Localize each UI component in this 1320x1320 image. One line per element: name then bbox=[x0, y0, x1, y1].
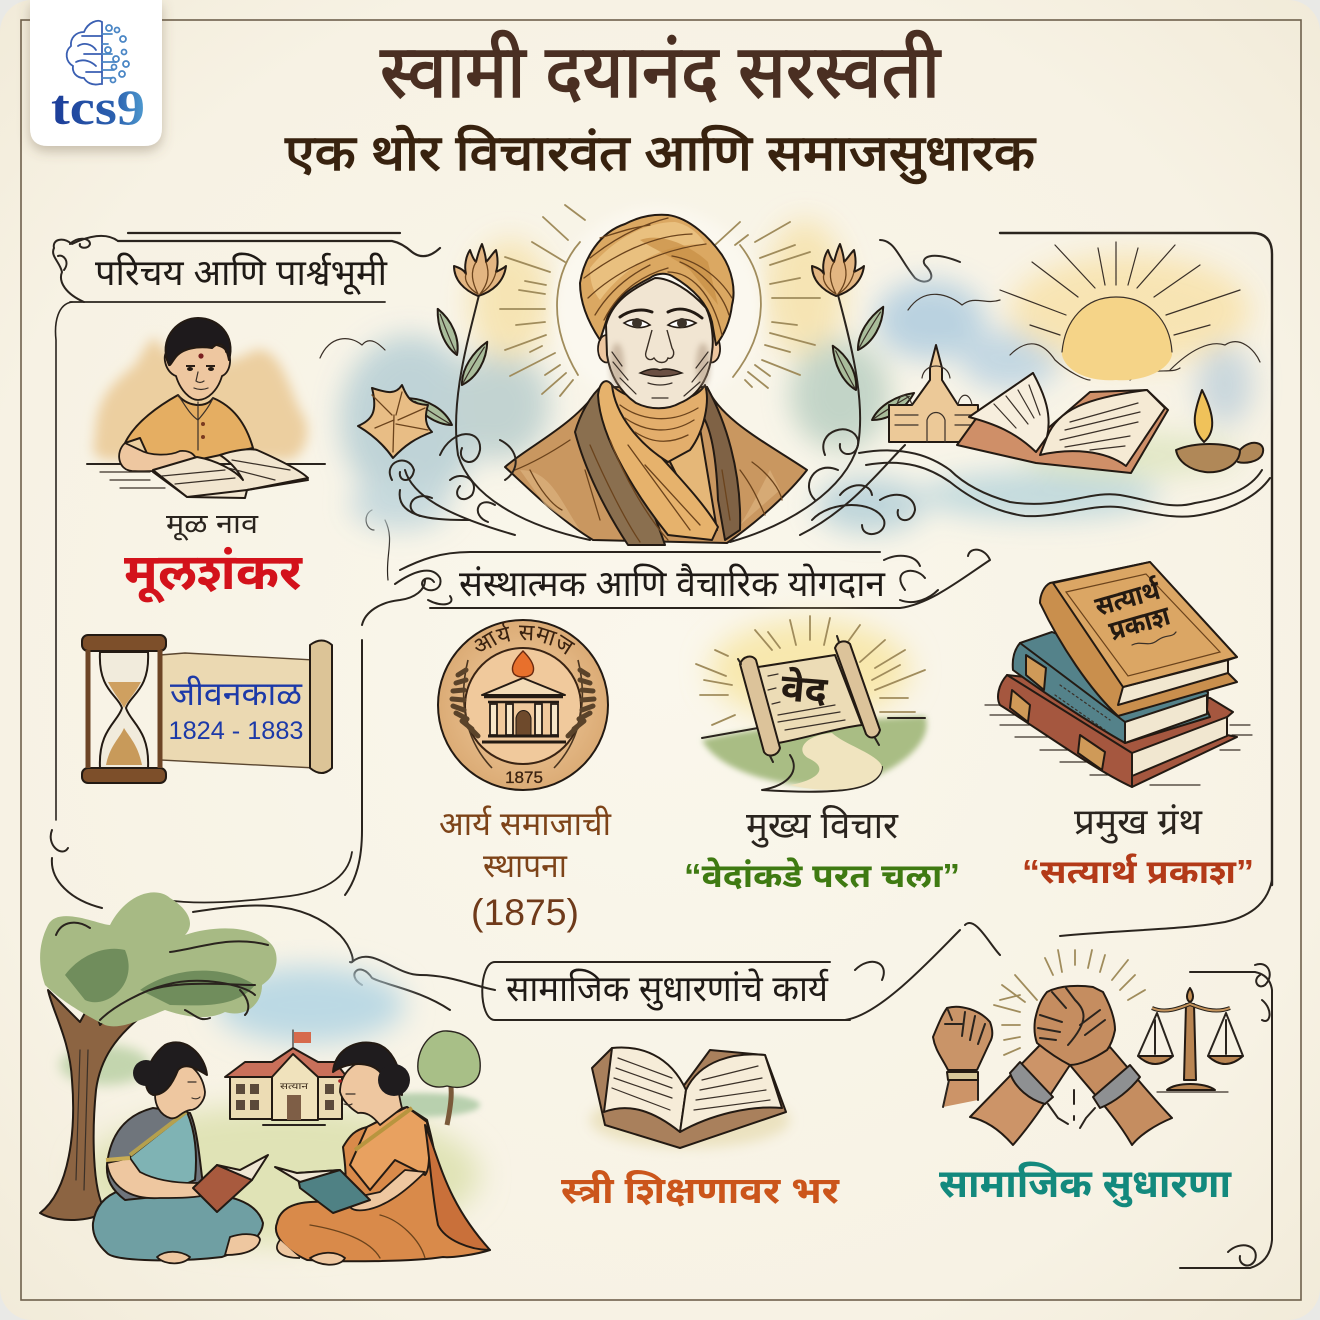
icon: open book bbox=[590, 1047, 790, 1148]
fold lines bbox=[515, 405, 782, 542]
arm bbox=[107, 1158, 213, 1198]
highlight: name: मूलशंकर bbox=[124, 544, 303, 604]
icon: left vine with lotus bbox=[358, 244, 590, 540]
head bbox=[165, 343, 230, 400]
halo arcs bbox=[557, 242, 761, 377]
robe wash highlight bbox=[520, 470, 780, 530]
icon: veda scroll bbox=[696, 616, 927, 792]
subtitle: एक थोर विचारवंत आणि समाजसुधारक bbox=[285, 125, 1037, 184]
icon: book stack: सत्यार्थ bbox=[1091, 574, 1164, 622]
portrait scene bbox=[320, 205, 1270, 545]
logo wordmark: tcs9 bbox=[51, 79, 145, 135]
ears bbox=[598, 335, 720, 362]
halo bbox=[554, 207, 762, 407]
kurta chest bbox=[668, 428, 717, 530]
cloud outlines bbox=[320, 294, 1260, 380]
icon: scroll bbox=[160, 653, 315, 768]
label: establishment: स्थापना bbox=[483, 847, 568, 884]
saree body bbox=[276, 1107, 490, 1261]
icon: right vine with lotus bbox=[730, 244, 917, 542]
icon: seal: 1875 bbox=[505, 768, 543, 787]
icon: turban bbox=[580, 215, 734, 345]
icon: seal bbox=[437, 619, 609, 791]
right forearm bbox=[1070, 1047, 1172, 1145]
heading: introduction: परिचय आणि पार्श्वभूमी bbox=[95, 252, 388, 295]
icon: school: सत्यान bbox=[280, 1081, 309, 1091]
icon: open book bbox=[957, 373, 1168, 473]
torso bbox=[107, 1108, 204, 1200]
icon: book stack bbox=[985, 562, 1252, 787]
blue book bbox=[1013, 632, 1210, 743]
robe bbox=[505, 387, 807, 543]
orange book pages and cover bbox=[1040, 562, 1237, 716]
value: years: 1824 - 1883 bbox=[168, 717, 304, 745]
dark scarf left bbox=[575, 385, 665, 545]
red book bbox=[998, 675, 1237, 787]
label: lifespan: जीवनकाळ bbox=[170, 675, 303, 712]
panel: women's education bbox=[561, 1047, 840, 1211]
icon: temple bbox=[889, 345, 978, 442]
watercolour wash behind portrait bbox=[340, 220, 1253, 533]
panel: childhood bbox=[87, 318, 325, 604]
icon: hourglass bbox=[82, 635, 166, 783]
icon: broken chains and hands bbox=[933, 950, 1172, 1145]
icon: seal: आर्य समाज bbox=[474, 620, 576, 655]
label: founding: आर्य समाजाची bbox=[439, 805, 612, 842]
flower bbox=[358, 385, 432, 458]
label: original name: मूळ नाव bbox=[166, 509, 259, 541]
icon: oil lamp bbox=[1176, 390, 1263, 472]
book bbox=[193, 1165, 252, 1212]
label: main book: प्रमुख ग्रंथ bbox=[1074, 801, 1203, 844]
panel: main book bbox=[985, 562, 1254, 890]
shadow lines bbox=[985, 705, 1252, 785]
icon: veda scroll: वेद bbox=[779, 665, 830, 713]
dark scarf right bbox=[695, 387, 740, 540]
icon: sun bbox=[1000, 242, 1240, 380]
quote: book title: “सत्यार्थ प्रकाश” bbox=[1022, 853, 1254, 890]
label: women's education: स्त्री शिक्षणावर भर bbox=[561, 1170, 840, 1211]
turban folds bbox=[584, 218, 732, 335]
panel: lifespan bbox=[82, 635, 332, 783]
logo card bbox=[30, 0, 162, 146]
icon: scales of justice bbox=[1138, 988, 1243, 1092]
neck wrap bbox=[612, 385, 707, 462]
panel: main thought bbox=[684, 616, 960, 894]
watercolour sky and ground bbox=[60, 967, 480, 1245]
icon: brain circuit bbox=[67, 21, 129, 85]
clasped hands bbox=[1034, 986, 1115, 1065]
light scarf bbox=[598, 381, 718, 540]
icon: boy reading bbox=[87, 318, 325, 498]
book bbox=[153, 449, 308, 498]
shirt bbox=[125, 395, 253, 460]
icon: small tree bbox=[418, 1031, 480, 1125]
arm bbox=[119, 443, 197, 471]
illustration: women reading bbox=[40, 892, 490, 1265]
legs bbox=[93, 1186, 263, 1260]
panel: arya samaj seal bbox=[437, 619, 612, 933]
section frames and flourishes bbox=[51, 233, 1272, 1268]
icon: tree bbox=[40, 892, 277, 1220]
value: year: (1875) bbox=[471, 892, 579, 933]
sun rays around head bbox=[500, 205, 820, 396]
quote: back to the vedas: “वेदांकडे परत चला” bbox=[684, 856, 960, 894]
heading: social reform: सामाजिक सुधारणांचे कार्य bbox=[506, 968, 829, 1011]
label: main thought: मुख्य विचार bbox=[746, 805, 899, 848]
panel: social reform bbox=[933, 950, 1243, 1208]
label: social reform: सामाजिक सुधारणा bbox=[939, 1162, 1233, 1208]
eyebrows and eyes bbox=[620, 309, 702, 318]
icon: book stack: प्रकाश bbox=[1106, 600, 1174, 646]
arm bbox=[349, 1170, 425, 1210]
fist bbox=[933, 1007, 992, 1107]
head bbox=[340, 1060, 402, 1125]
heading: institutional contribution: संस्थात्मक आणि वैचारिक योगदान bbox=[459, 563, 886, 604]
icon: school bbox=[225, 1030, 347, 1125]
icon: woman in blue saree bbox=[93, 1042, 268, 1263]
head bbox=[155, 1063, 205, 1118]
icon: scroll roller bbox=[310, 640, 332, 773]
face shading bbox=[610, 309, 710, 398]
left forearm bbox=[970, 1045, 1070, 1145]
icon: flowing river lines bbox=[859, 450, 1270, 517]
icon: woman in orange saree bbox=[275, 1042, 490, 1265]
turban highlights bbox=[590, 222, 706, 300]
laurels bbox=[464, 660, 582, 768]
face bbox=[606, 278, 713, 408]
flame bbox=[512, 651, 534, 677]
temple bbox=[482, 678, 565, 695]
book bbox=[297, 1170, 370, 1213]
title: स्वामी दयानंद सरस्वती bbox=[380, 30, 942, 113]
shackles bbox=[1010, 1062, 1053, 1104]
